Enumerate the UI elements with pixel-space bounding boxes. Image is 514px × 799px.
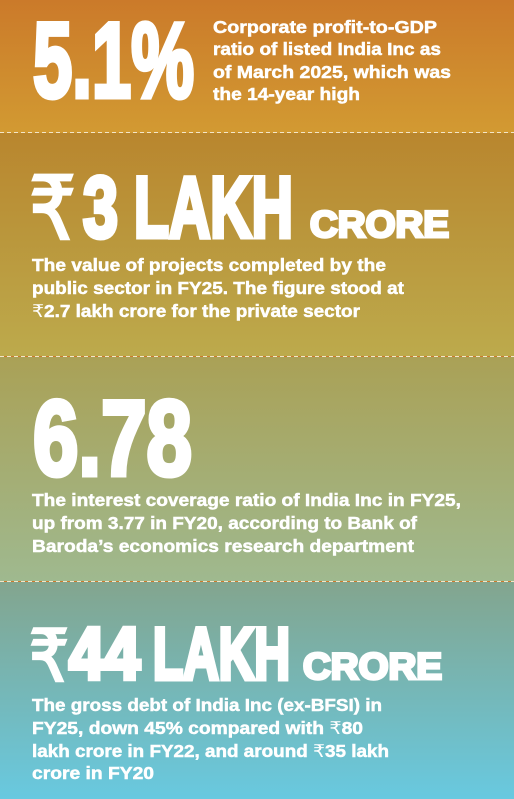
- heading: rupee 3 lakh crore: 3: [83, 160, 118, 256]
- panel: gross debt: [0, 582, 514, 799]
- heading: rupee 44 lakh crore: LAKH: [153, 614, 290, 695]
- text block: profit-to-GDP description: ratio of listed India Inc as: [213, 39, 441, 59]
- heading: rupee 3 lakh crore: LAKH: [134, 160, 293, 256]
- big number: 5.1%: 5.1%: [33, 0, 194, 120]
- heading: rupee 3 lakh crore: [29, 159, 449, 258]
- big number: 6.78: 6.78: [33, 378, 192, 498]
- heading: rupee 44 lakh crore: ₹: [29, 617, 69, 697]
- text block: interest coverage description: [32, 490, 461, 556]
- heading: rupee 44 lakh crore: 44: [69, 614, 140, 695]
- text block: profit-to-GDP description: [213, 17, 451, 104]
- text block: profit-to-GDP description: the 14-year high: [213, 84, 360, 104]
- text block: interest coverage description: The interest coverage ratio of India Inc in FY25,: [32, 490, 461, 510]
- panel: profit-to-GDP ratio: [0, 0, 514, 133]
- text block: profit-to-GDP description: of March 2025, which was: [213, 62, 451, 82]
- text block: interest coverage description: Baroda’s economics research department: [32, 536, 414, 556]
- heading: rupee 3 lakh crore: CRORE: [310, 204, 449, 245]
- heading: rupee 44 lakh crore: CRORE: [303, 646, 442, 687]
- text block: public sector description: [32, 255, 404, 321]
- text block: interest coverage description: up from 3.77 in FY20, according to Bank of: [32, 513, 417, 533]
- text block: gross debt description: lakh crore in FY22, and around ₹35 lakh: [32, 741, 389, 761]
- heading: rupee 3 lakh crore: ₹: [29, 159, 76, 258]
- panel: public sector projects: [0, 133, 514, 356]
- text block: gross debt description: FY25, down 45% compared with ₹80: [32, 718, 363, 738]
- text block: gross debt description: crore in FY20: [32, 763, 154, 783]
- text block: gross debt description: The gross debt of India Inc (ex-BFSI) in: [32, 695, 382, 715]
- text block: public sector description: ₹2.7 lakh crore for the private sector: [32, 301, 360, 321]
- text block: gross debt description: [32, 695, 389, 783]
- text block: public sector description: The value of projects completed by the: [32, 255, 386, 275]
- text block: public sector description: public sector in FY25. The figure stood at: [32, 278, 404, 298]
- panel: interest coverage ratio: [0, 357, 514, 581]
- text block: profit-to-GDP description: Corporate profit-to-GDP: [213, 17, 437, 37]
- heading: rupee 44 lakh crore: [29, 614, 442, 697]
